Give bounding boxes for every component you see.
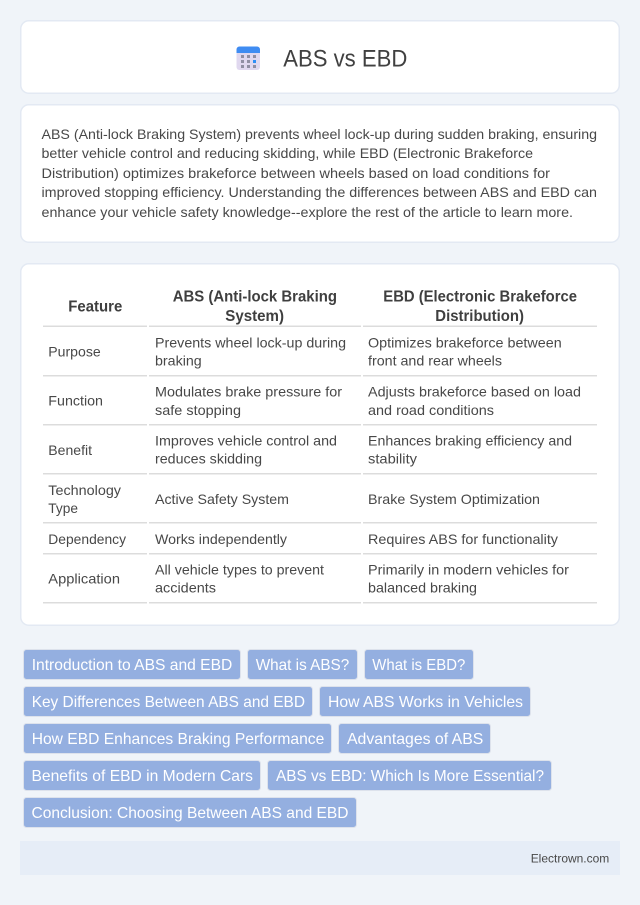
tag: how abs works [320, 686, 530, 716]
panel: topic tags [24, 650, 552, 828]
tag: which is more essential [268, 760, 552, 790]
tag: introduction: Introduction to ABS and EBD [32, 657, 232, 674]
row: purpose: front and rear wheels [368, 353, 502, 369]
tag: what is ebd: What is EBD? [372, 657, 465, 674]
row: function [48, 384, 581, 418]
table header row [68, 288, 577, 325]
row: benefit: stability [368, 451, 417, 467]
row: benefit: Improves vehicle control and [155, 433, 337, 449]
table header row: System) [225, 308, 284, 325]
row: purpose: Optimizes brakeforce between [368, 335, 562, 351]
tag: how ebd enhances [24, 724, 332, 754]
tag: key differences: Key Differences Between ABS and EBD [32, 694, 305, 711]
title: ABS vs EBD [283, 46, 407, 73]
tag: benefits of ebd: Benefits of EBD in Modern Cars [32, 768, 253, 785]
row: benefit [48, 433, 572, 467]
row: benefit: Enhances braking efficiency and [368, 433, 572, 449]
intro paragraph: improved stopping efficiency. Understanding the differences between ABS and EBD can [42, 184, 597, 200]
row: purpose: Prevents wheel lock-up during [155, 335, 346, 351]
panel: title header [21, 21, 619, 93]
table header row: ABS (Anti-lock Braking [173, 288, 337, 306]
row: benefit: Benefit [48, 442, 92, 458]
footer credit: Electrown.com [531, 851, 609, 865]
intro paragraph: better vehicle control and reducing skidding, while EBD (Electronic Brakeforce [42, 145, 533, 161]
tag: what is abs: What is ABS? [256, 657, 349, 674]
tag: advantages of abs [338, 724, 490, 754]
row: dependency: Works independently [155, 531, 287, 547]
row: technology type: Brake System Optimization [368, 491, 540, 507]
row: function: Modulates brake pressure for [155, 384, 342, 400]
tag: how abs works: How ABS Works in Vehicles [328, 694, 523, 711]
row: function: and road conditions [368, 402, 494, 418]
intro paragraph: ABS (Anti-lock Braking System) prevents wheel lock-up during sudden braking, ensuring [42, 126, 597, 142]
row: purpose [48, 335, 562, 369]
tag: benefits of ebd [24, 760, 260, 790]
tag: conclusion: Conclusion: Choosing Between ABS and EBD [32, 805, 348, 822]
table header row: Distribution) [435, 308, 524, 325]
row: dependency: Requires ABS for functionality [368, 531, 558, 547]
panel: introduction text [21, 105, 619, 242]
row: purpose: braking [155, 353, 202, 369]
tag: conclusion [24, 798, 356, 828]
panel: comparison table [21, 264, 619, 625]
tag: key differences [24, 686, 312, 716]
row: application: Primarily in modern vehicles for [368, 562, 569, 578]
row: application: All vehicle types to prevent [155, 562, 324, 578]
row: benefit: reduces skidding [155, 451, 262, 467]
row: application: accidents [155, 580, 216, 596]
intro paragraph: enhance your vehicle safety knowledge--explore the rest of the article to learn more. [42, 204, 573, 220]
tag: what is ebd [364, 650, 474, 680]
row: dependency [48, 531, 558, 547]
row: technology type [48, 482, 540, 516]
row: application: Application [48, 571, 120, 587]
row: technology type: Type [48, 500, 78, 516]
table header row: Feature [68, 298, 122, 316]
row: function: Function [48, 393, 103, 409]
row: application: balanced braking [368, 580, 477, 596]
row: function: Adjusts brakeforce based on load [368, 384, 581, 400]
table header row: EBD (Electronic Brakeforce [383, 288, 577, 306]
tag: introduction [24, 650, 240, 680]
row: purpose: Purpose [48, 344, 101, 360]
row: dependency: Dependency [48, 531, 126, 547]
tag: what is abs [248, 650, 358, 680]
icon: calendar [236, 46, 260, 70]
row: technology type: Active Safety System [155, 491, 289, 507]
tag: advantages of abs: Advantages of ABS [347, 731, 483, 748]
intro paragraph [42, 126, 597, 220]
footer [20, 841, 620, 875]
intro paragraph: Distribution) optimizes brakeforce between wheels based on load conditions for [42, 165, 550, 181]
row: application [48, 562, 569, 596]
tag: which is more essential: ABS vs EBD: Which Is More Essential? [276, 768, 544, 785]
tag: how ebd enhances: How EBD Enhances Braking Performance [32, 731, 324, 748]
row: function: safe stopping [155, 402, 241, 418]
row: technology type: Technology [48, 482, 121, 498]
